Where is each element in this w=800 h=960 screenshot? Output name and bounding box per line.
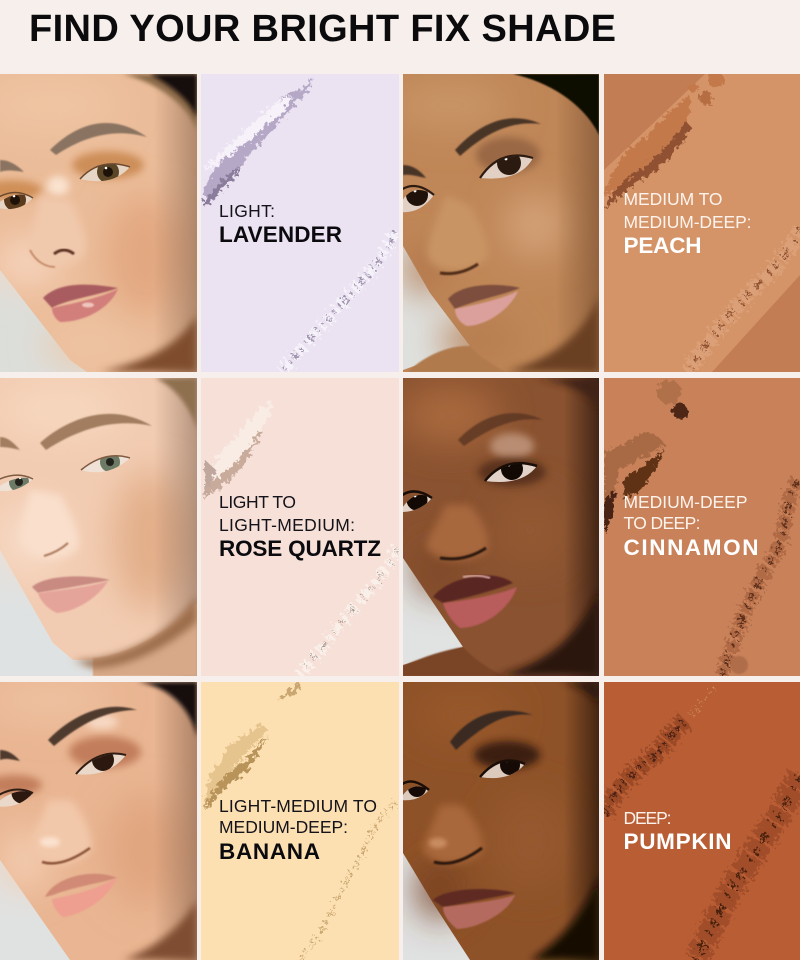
label: light to light-medium rose quartz: LIGHT TO	[219, 492, 296, 512]
label: light-medium to medium-deep banana: MEDIUM-DEEP:	[219, 817, 348, 837]
label: medium to medium-deep peach: PEACH	[624, 233, 702, 258]
label: medium-deep to deep cinnamon: TO DEEP:	[624, 513, 700, 533]
panel: rose quartz swatch	[201, 378, 399, 676]
label: deep pumpkin: PUMPKIN	[624, 829, 732, 854]
label: light to light-medium rose quartz	[219, 492, 381, 561]
title: FIND YOUR BRIGHT FIX SHADE	[29, 8, 616, 50]
label: light lavender: LAVENDER	[219, 222, 342, 247]
panel: light-medium model portrait	[0, 680, 197, 960]
panel: peach swatch	[604, 72, 800, 372]
powder crumbs: cinnamon upper	[604, 380, 688, 532]
panel: lavender swatch	[201, 74, 399, 372]
powder crumbs: lavender upper	[203, 77, 312, 208]
label: light to light-medium rose quartz: LIGHT-MEDIUM:	[219, 515, 355, 535]
powder crumbs: pumpkin upper	[604, 688, 715, 815]
panel: light to light-medium model portrait	[0, 378, 197, 676]
powder crumbs: cinnamon lower	[722, 480, 798, 676]
panel: medium model portrait	[390, 74, 599, 372]
panel: pumpkin swatch	[604, 682, 800, 960]
powder crumbs: banana upper	[204, 684, 302, 810]
label: light-medium to medium-deep banana: LIGHT-MEDIUM TO	[219, 796, 377, 816]
powder crumbs: rose quartz upper	[204, 400, 272, 500]
label: light-medium to medium-deep banana	[220, 800, 376, 859]
panel: cinnamon swatch	[604, 378, 800, 676]
powder crumb: cinnamon ball	[730, 656, 748, 674]
label: medium-deep to deep cinnamon: CINNAMON	[624, 535, 758, 560]
label: light lavender: LIGHT:	[219, 201, 275, 221]
panel: deep model portrait	[401, 682, 599, 960]
label: light-medium to medium-deep banana: BANANA	[219, 839, 320, 864]
label: medium to medium-deep peach: MEDIUM-DEEP:	[624, 212, 752, 232]
label: medium to medium-deep peach: MEDIUM TO	[624, 189, 722, 209]
powder crumbs: rose quartz lower	[300, 548, 398, 676]
label: deep pumpkin	[624, 812, 730, 849]
powder crumbs: pumpkin lower	[695, 775, 800, 960]
powder crumbs: lavender lower	[282, 232, 396, 372]
panel: banana swatch	[201, 682, 399, 960]
powder crumbs: peach upper	[604, 72, 724, 210]
powder crumbs: banana lower	[300, 802, 396, 960]
panel: medium-deep model portrait	[400, 378, 599, 676]
powder crumbs: peach lower	[688, 228, 800, 372]
label: medium-deep to deep cinnamon	[624, 496, 757, 555]
panel: light model portrait	[0, 74, 197, 372]
label: deep pumpkin: DEEP:	[624, 808, 672, 828]
label: light to light-medium rose quartz: ROSE QUARTZ	[219, 536, 381, 561]
label: light lavender	[220, 205, 342, 242]
label: medium-deep to deep cinnamon: MEDIUM-DEEP	[624, 492, 748, 512]
label: medium to medium-deep peach	[624, 193, 750, 253]
